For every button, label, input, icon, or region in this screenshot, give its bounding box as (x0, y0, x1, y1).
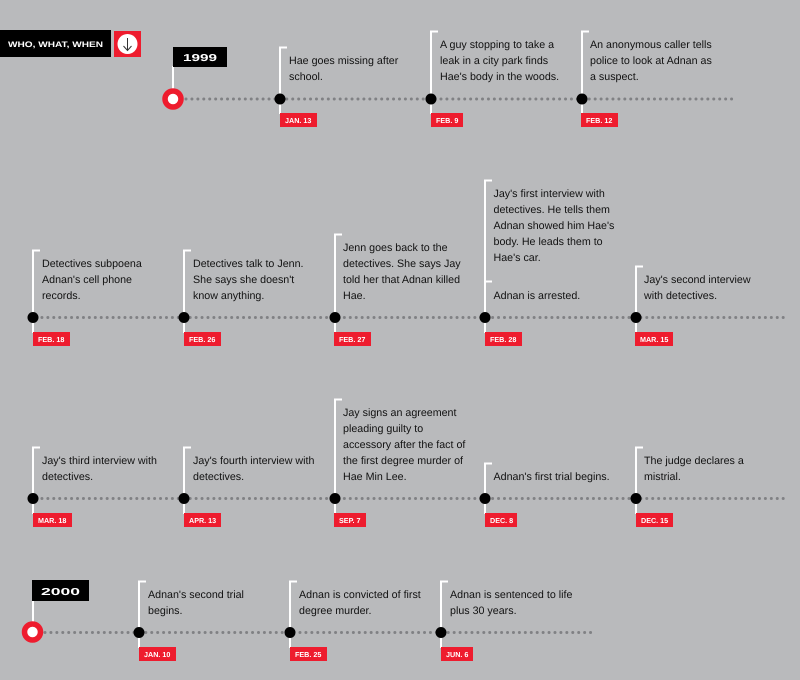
year marker: 1999 (165, 47, 227, 107)
event: Feb. 12: police to look at Adnan as (590, 55, 712, 67)
event: Feb. 28 (480, 180, 614, 346)
event: Sep. 7: the first degree murder of (343, 455, 463, 467)
event: Sep. 7: SEP. 7 (339, 516, 360, 525)
year marker: 2000: 2000 (41, 587, 81, 598)
icon: down arrow button (114, 31, 141, 57)
event: Feb. 26: She says she doesn't (193, 274, 294, 286)
event: Dec. 15: The judge declares a (644, 455, 744, 467)
event: Feb. 9: Hae's body in the woods. (440, 71, 559, 83)
event: Feb. 27: Hae. (343, 290, 366, 302)
event: Jun. 6: plus 30 years. (450, 605, 517, 617)
event: Mar. 18: detectives. (42, 471, 93, 483)
event: Feb. 28: Adnan is arrested. (494, 290, 580, 302)
event: Jun. 6: Adnan is sentenced to life (450, 589, 572, 601)
timeline row: 1999 part 2 (28, 180, 785, 346)
timeline row: 1999 part 3 (28, 400, 785, 527)
event: Feb. 27: detectives. She says Jay (343, 258, 461, 270)
event: Feb. 25: FEB. 25 (295, 650, 321, 659)
event: Feb. 27: told her that Adnan killed (343, 274, 460, 286)
event: Sep. 7: pleading guilty to (343, 423, 423, 435)
event: Apr. 13: Jay's fourth interview with (193, 455, 314, 467)
timeline row: 2000 (24, 580, 591, 661)
event: Feb. 12: a suspect. (590, 71, 639, 83)
event: Feb. 18: records. (42, 290, 81, 302)
event: Mar. 18 (28, 448, 157, 527)
event: Jan. 10: begins. (148, 605, 182, 617)
event: Jan. 13 (274, 48, 399, 127)
event: Feb. 12: An anonymous caller tells (590, 39, 712, 51)
event: Feb. 9: FEB. 9 (436, 116, 458, 125)
event: Feb. 18: Adnan's cell phone (42, 274, 132, 286)
event: Feb. 26: FEB. 26 (189, 335, 215, 344)
event: Jan. 10 (134, 582, 244, 661)
event: Mar. 15 (630, 266, 751, 346)
event: Feb. 28: detectives. He tells them (494, 204, 610, 216)
event: Mar. 15: with detectives. (643, 290, 717, 302)
event: Jan. 13: JAN. 13 (285, 116, 311, 125)
event: Dec. 8 (480, 464, 610, 527)
event: Feb. 26 (178, 250, 304, 346)
event: Feb. 18 (28, 250, 142, 346)
event: Jan. 10: Adnan's second trial (148, 589, 244, 601)
year marker: 2000 (24, 580, 89, 640)
event: Jun. 6 (436, 582, 572, 661)
event: Dec. 15: mistrial. (644, 471, 681, 483)
event: Feb. 9: leak in a city park finds (440, 55, 548, 67)
event: Feb. 9 (426, 32, 559, 127)
event: Feb. 26: know anything. (193, 290, 264, 302)
event: Jan. 13: Hae goes missing after (289, 55, 399, 67)
event: Jun. 6: JUN. 6 (446, 650, 468, 659)
event: Feb. 27 (330, 234, 461, 346)
event: Apr. 13 (178, 448, 314, 527)
event: Dec. 15 (630, 448, 744, 527)
timeline row: 1999 part 1 (165, 32, 732, 127)
event: Mar. 15: MAR. 15 (640, 335, 668, 344)
event: Dec. 15: DEC. 15 (641, 516, 668, 525)
event: Feb. 28: Jay's first interview with (494, 188, 605, 200)
event: Dec. 8: Adnan's first trial begins. (494, 471, 610, 483)
event: Feb. 12: FEB. 12 (586, 116, 612, 125)
event: Sep. 7: accessory after the fact of (343, 439, 465, 451)
event: Apr. 13: APR. 13 (189, 516, 216, 525)
title banner: who, what, when (0, 30, 111, 57)
event: Mar. 18: MAR. 18 (38, 516, 66, 525)
event: Feb. 25: degree murder. (299, 605, 371, 617)
event: Mar. 18: Jay's third interview with (42, 455, 157, 467)
event: Feb. 25: Adnan is convicted of first (299, 589, 421, 601)
event: Feb. 18: FEB. 18 (38, 335, 64, 344)
event: Mar. 15: Jay's second interview (644, 274, 751, 286)
event: Feb. 9: A guy stopping to take a (440, 39, 554, 51)
event: Feb. 27: FEB. 27 (339, 335, 365, 344)
event: Feb. 28: body. He leads them to (494, 236, 603, 248)
event: Jan. 13: school. (289, 71, 323, 83)
event: Apr. 13: detectives. (193, 471, 244, 483)
event: Feb. 27: Jenn goes back to the (343, 242, 448, 254)
event: Dec. 8: DEC. 8 (490, 516, 513, 525)
event: Feb. 25 (284, 582, 421, 661)
year marker: 1999: 1999 (183, 53, 218, 64)
event: Feb. 28: Adnan showed him Hae's (494, 220, 614, 232)
event: Feb. 28: Hae's car. (494, 252, 541, 264)
event: Sep. 7: Jay signs an agreement (343, 407, 457, 419)
event: Jan. 10: JAN. 10 (144, 650, 170, 659)
event: Feb. 28: FEB. 28 (490, 335, 516, 344)
event: Feb. 12 (576, 32, 712, 127)
event: Sep. 7: Hae Min Lee. (343, 471, 407, 483)
event: Feb. 26: Detectives talk to Jenn. (193, 258, 304, 270)
title banner: who, what, when: WHO, WHAT, WHEN (8, 40, 103, 49)
event: Feb. 18: Detectives subpoena (42, 258, 142, 270)
event: Sep. 7 (330, 400, 465, 527)
